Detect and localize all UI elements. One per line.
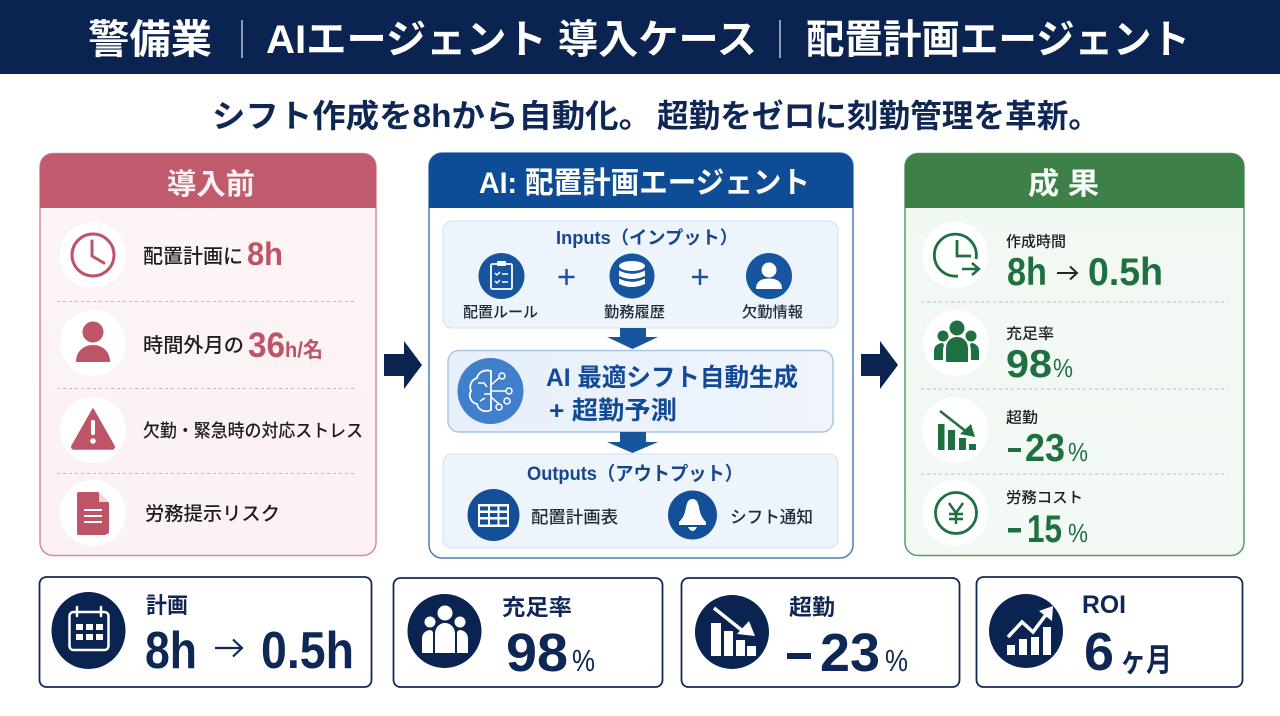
result: labor cost: %: [1068, 518, 1088, 548]
result: creation time: 0.5h: [1088, 251, 1163, 294]
AI process text: [546, 364, 798, 425]
result: fill rate: %: [1053, 353, 1073, 383]
icon: AI brain: [458, 358, 524, 424]
KPI text: ROI: [1082, 591, 1172, 682]
icon: checklist: [478, 253, 524, 299]
AI process text: + 超勤予測: [549, 397, 677, 425]
inputs box: Inputs（インプット）: [556, 228, 738, 248]
panel heading: before: 導入前: [167, 168, 255, 201]
KPI text: overtime: 23: [820, 623, 880, 683]
KPI text: fill rate: 充足率: [502, 595, 572, 620]
panel heading: results: 成 果: [1028, 168, 1099, 201]
before item: overtime: h/名: [285, 339, 323, 362]
KPI text: overtime: 超勤: [789, 595, 835, 620]
before item: overtime: 36: [248, 326, 285, 365]
before item: planning time: [143, 236, 283, 272]
subtitle: [212, 98, 1100, 134]
icon: bell: [668, 490, 717, 540]
KPI text: plan: [145, 593, 354, 680]
KPI card: fill rate: [394, 578, 662, 687]
icon: clock with arrow: [922, 222, 988, 288]
KPI text: plan: 計画: [146, 593, 188, 618]
icon: declining chart: [922, 397, 988, 463]
icon: people: [408, 594, 482, 668]
plus sign: [692, 269, 708, 285]
result: labor cost: 労務コスト: [1006, 490, 1083, 506]
icon: user: [746, 253, 792, 299]
result: overtime: 超勤: [1006, 408, 1038, 426]
before item: planning time: 8h: [247, 236, 283, 272]
subtitle: 超勤をゼロに刻勤管理を革新。: [657, 98, 1100, 134]
title banner: 配置計画エージェント: [806, 18, 1190, 62]
result: labor cost: 15: [1027, 508, 1062, 551]
result: fill rate: [1006, 326, 1073, 386]
result: creation time: 8h: [1007, 251, 1047, 294]
panel: results: [905, 154, 1244, 556]
icon: declining bars: [695, 595, 769, 669]
result: overtime: [1006, 408, 1088, 470]
icon: yen coin: [922, 480, 988, 546]
input labels: [463, 303, 803, 321]
icon: calendar: [52, 592, 126, 669]
input labels: 勤務履歴: [604, 303, 665, 321]
before item: stress: 欠勤・緊急時の対応ストレス: [143, 421, 363, 441]
panel: before: [40, 154, 376, 556]
KPI text: fill rate: [502, 595, 595, 683]
icon: rising chart: [989, 594, 1063, 668]
arrow: before to AI: [384, 341, 422, 389]
result: creation time: 作成時間: [1006, 234, 1066, 250]
KPI text: ROI: 6: [1084, 622, 1114, 682]
KPI text: plan: 0.5h: [261, 622, 354, 680]
KPI text: overtime: %: [885, 643, 908, 678]
before item: planning time: 配置計画に: [143, 245, 243, 268]
inputs box: [443, 221, 838, 328]
icon: group: [923, 310, 989, 376]
result: fill rate: 98: [1006, 343, 1052, 386]
title banner: 警備業: [88, 18, 212, 62]
arrow: AI to outputs: [607, 432, 658, 453]
AI process box: [448, 350, 833, 432]
result: overtime: %: [1068, 437, 1088, 467]
icon: clock: [60, 222, 126, 288]
KPI card: ROI: [976, 577, 1242, 687]
KPI text: ROI: ヶ月: [1120, 642, 1172, 678]
arrow: AI to results: [861, 341, 898, 389]
AI process text: AI 最適シフト自動生成: [546, 364, 798, 392]
outputs box: [443, 454, 838, 548]
icon: document: [60, 480, 126, 546]
KPI card: plan: [40, 577, 372, 687]
panel: AI agent: [429, 153, 853, 558]
title banner: [0, 0, 1280, 74]
plus sign: [558, 269, 574, 285]
KPI text: ROI: ROI: [1082, 591, 1126, 619]
panel heading: AI agent: AI: 配置計画エージェント: [479, 167, 810, 200]
subtitle: シフト作成を8hから自動化。: [212, 98, 652, 134]
KPI text: fill rate: 98: [506, 623, 568, 683]
input labels: 配置ルール: [463, 304, 538, 321]
result: creation time: [1006, 234, 1163, 294]
result: labor cost: [1006, 490, 1088, 551]
before item: overtime: [143, 326, 323, 365]
before item: labor risk: 労務提示リスク: [145, 503, 280, 525]
KPI card: overtime: [682, 578, 960, 687]
KPI text: fill rate: %: [572, 643, 595, 678]
result: overtime: 23: [1025, 427, 1065, 470]
title banner: AIエージェント 導入ケース: [266, 18, 757, 62]
result: fill rate: 充足率: [1006, 326, 1054, 342]
KPI text: plan: 8h: [145, 622, 197, 680]
icon: person: [60, 310, 126, 376]
KPI text: overtime: [787, 595, 908, 683]
outputs box: Outputs（アウトプット）: [527, 463, 743, 485]
output label: shift notice: シフト通知: [730, 508, 813, 527]
arrow: inputs to AI: [607, 328, 658, 349]
output label: plan table: 配置計画表: [531, 508, 618, 527]
icon: database: [610, 254, 654, 298]
icon: table: [468, 489, 520, 541]
before item: overtime: 時間外月の: [143, 334, 244, 357]
input labels: 欠勤情報: [742, 303, 803, 321]
icon: warning triangle: [60, 397, 126, 463]
